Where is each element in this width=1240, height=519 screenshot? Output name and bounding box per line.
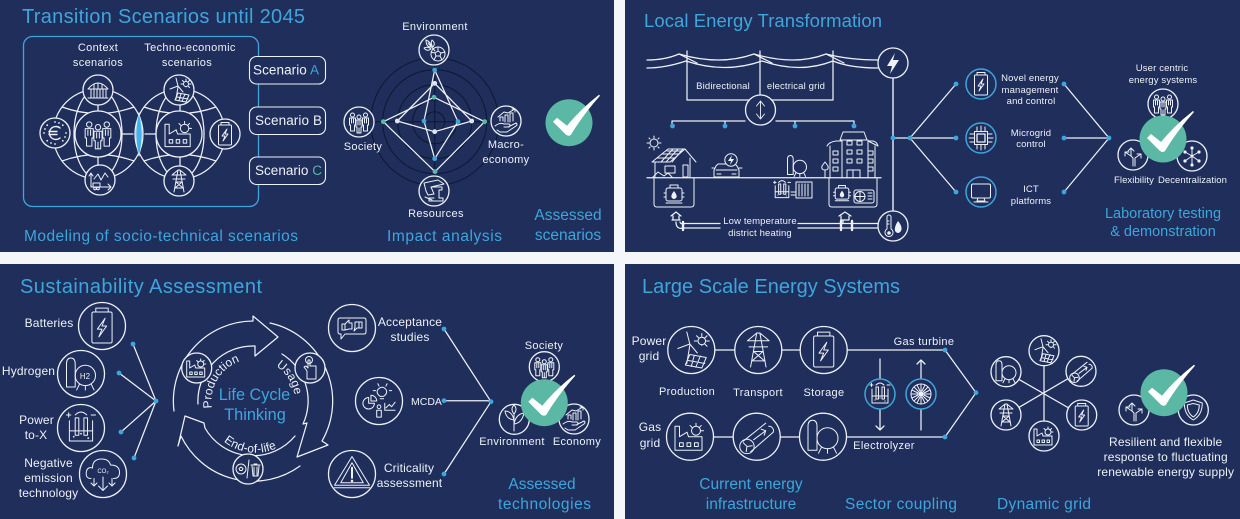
fan-out left (891, 82, 958, 194)
label: usage: Usage (278, 360, 300, 394)
icon: economy (559, 404, 589, 434)
label: production: Production (659, 386, 715, 398)
label: decentralization: Decentralization (1158, 175, 1227, 186)
label: microgrid control: Microgrid (1011, 128, 1051, 139)
dynamic grid network (991, 336, 1097, 451)
icon: hydrogen (58, 350, 104, 398)
title: local energy: Local Energy Transformation (644, 10, 882, 31)
power-to-gas equipment (774, 181, 812, 198)
text: response: Resilient and flexible (1109, 435, 1223, 449)
icon: transport (735, 326, 782, 374)
label: end of life: End-of-life (224, 435, 276, 453)
caption: current energy infrastructure: infrastructure (706, 496, 796, 513)
curved path: end of life (220, 438, 290, 453)
icon: end of life (233, 454, 263, 484)
panel: local energy transformation (625, 0, 1240, 252)
label: power to X: Power (19, 413, 54, 427)
connecting lines (714, 350, 976, 437)
icon: microgrid (966, 123, 996, 153)
label: bidirectional: Bidirectional (696, 81, 750, 92)
label: ICT platforms: platforms (1011, 196, 1051, 207)
label: transport: Transport (733, 387, 783, 399)
box: scenario C (250, 157, 326, 184)
connector dots (943, 348, 978, 439)
label: novel energy: Novel energy (1001, 73, 1059, 84)
label: flexibility: Flexibility (1114, 175, 1154, 186)
fan-in left (117, 342, 158, 460)
life cycle title: Life Cycle (219, 386, 290, 404)
icon: check (1140, 365, 1195, 416)
fan-in right (1062, 82, 1111, 194)
label: society: Society (525, 340, 563, 352)
icon: criticality (328, 450, 376, 498)
icon: usage (295, 353, 325, 383)
label: environment: Environment (479, 436, 545, 448)
scenario frame (24, 36, 258, 206)
box: scenario B (250, 107, 326, 134)
label: macro-economy: economy (482, 154, 530, 166)
label: techno-economic scenarios: scenarios (162, 57, 212, 69)
title: large scale: Large Scale Energy Systems (642, 276, 900, 298)
label: criticality assessment: Criticality (384, 461, 434, 475)
text: response: response to fluctuating (1104, 450, 1228, 464)
label: MCDA: MCDA (411, 396, 442, 408)
icon: resilience shield (1178, 395, 1208, 425)
building heat storage and pump (834, 186, 874, 203)
district heating pipes (671, 212, 878, 230)
icon: bidirectional converter (746, 95, 776, 125)
label: microgrid control: control (1016, 139, 1046, 150)
box: scenario A (250, 56, 326, 84)
hydrogen storage (788, 156, 806, 176)
label: gas grid: Gas (639, 420, 661, 434)
caption: assessed technologies: Assessed (508, 476, 576, 493)
icon: hydrogen: H2 (80, 372, 91, 381)
icon: environment (419, 35, 449, 65)
icon: check (1140, 111, 1194, 162)
small tree (822, 162, 828, 178)
icon: acceptance (328, 304, 376, 352)
text: response: renewable energy supply (1097, 465, 1234, 479)
radar chart (370, 58, 499, 186)
life cycle arrows (173, 316, 333, 481)
label: environment: Environment (402, 21, 468, 33)
caption: laboratory testing: Laboratory testing (1105, 206, 1221, 222)
caption: laboratory testing: & demonstration (1110, 224, 1216, 240)
globe: context (40, 75, 143, 195)
box: scenario C: Scenario C (255, 163, 322, 178)
label: storage: Storage (804, 387, 844, 399)
label: society: Society (344, 141, 382, 153)
icon: gas storage (800, 413, 846, 460)
icon: flexibility (1119, 395, 1149, 425)
trunk line (892, 78, 894, 211)
ground line (647, 177, 881, 179)
fan-in centre (442, 327, 493, 476)
label: acceptance studies: studies (390, 330, 430, 344)
label: production: Production (203, 356, 239, 408)
power lines (647, 51, 878, 100)
icon: energy management (966, 69, 996, 99)
icon: society (529, 352, 559, 382)
label: electrical grid: electrical grid (767, 81, 825, 92)
label: resources: Resources (408, 208, 464, 220)
caption: impact analysis: Impact analysis (387, 228, 502, 245)
label: context scenarios: scenarios (73, 57, 123, 69)
label: electrolyzer: Electrolyzer (853, 440, 915, 452)
label: power grid: grid (639, 349, 659, 363)
caption: modeling: Modeling of socio-technical scenarios (24, 228, 298, 245)
label: criticality assessment: assessment (377, 476, 443, 490)
icon: environment (499, 404, 529, 434)
label: power grid: Power (632, 334, 666, 348)
label: techno-economic scenarios: Techno-economic (144, 42, 236, 54)
icon: resources (419, 176, 449, 206)
label: negative emission technology: emission (24, 471, 73, 485)
icon: decentralization (1177, 141, 1207, 171)
icon: negative emissions (80, 450, 126, 498)
life cycle title: Thinking (224, 406, 286, 424)
label: district heating: district heating (728, 228, 792, 239)
curved path: production (211, 360, 245, 408)
panel: large scale energy systems (625, 264, 1240, 519)
curved path: usage (276, 366, 295, 400)
caption: current energy infrastructure: Current energy (699, 476, 803, 493)
icon: negative emissions: CO₂ (97, 469, 109, 475)
icon: check (546, 95, 600, 146)
label: negative emission technology: technology (19, 486, 78, 500)
label: power to X: to-X (25, 428, 47, 442)
label: gas turbine: Gas turbine (894, 336, 954, 348)
icon: power to X (58, 404, 104, 452)
caption: dynamic grid: Dynamic grid (997, 496, 1091, 513)
icon: electrolyzer (865, 379, 895, 409)
icon: gas production (666, 413, 714, 460)
lens connector (121, 113, 156, 156)
icon: electricity (878, 48, 908, 78)
caption: sector coupling: Sector coupling (845, 496, 957, 513)
house heat storage (664, 185, 684, 203)
label: novel energy: management (1002, 85, 1059, 96)
icon: gas turbine (906, 379, 936, 409)
label: hydrogen: Hydrogen (2, 364, 55, 378)
icon: gas transport (733, 413, 780, 460)
icon: MCDA (356, 378, 402, 424)
panel: sustainability assessment (0, 264, 614, 519)
panel: transition scenarios (0, 0, 614, 252)
icon: society (344, 107, 374, 137)
label: gas grid: grid (640, 436, 660, 450)
icon: macro-economy (491, 106, 521, 136)
icon: flexibility (1118, 140, 1148, 170)
box: scenario B: Scenario B (255, 113, 322, 128)
title: transition scenarios: Transition Scenarios until 2045 (22, 6, 305, 28)
icon: production (668, 326, 715, 374)
icon: production (182, 353, 212, 383)
icon: batteries (78, 302, 126, 350)
apartment building (827, 132, 878, 207)
label: economy: Economy (553, 436, 601, 448)
label: macro-economy: Macro- (488, 139, 524, 151)
icon: users (1148, 89, 1178, 119)
icon: heat (878, 211, 908, 241)
label: ICT platforms: ICT (1023, 184, 1039, 195)
label: user centric: energy systems (1129, 75, 1197, 86)
house (647, 136, 696, 207)
label: context scenarios: Context (78, 42, 118, 54)
title: sustainability: Sustainability Assessment (20, 276, 262, 298)
electric vehicle (712, 154, 742, 177)
label: user centric: User centric (1136, 63, 1188, 74)
caption: assessed scenarios: Assessed (534, 207, 602, 224)
icon: storage (800, 326, 847, 374)
label: novel energy: and control (1007, 96, 1055, 107)
label: district heating: Low temperature (723, 216, 797, 227)
icon: ICT (966, 177, 996, 207)
label: acceptance studies: Acceptance (378, 315, 442, 329)
label: negative emission technology: Negative (24, 456, 73, 470)
box: scenario A: Scenario A (253, 62, 319, 78)
icon: check (521, 375, 575, 426)
globe: techno-economic (135, 75, 240, 196)
label: batteries: Batteries (25, 316, 73, 330)
caption: assessed technologies: technologies (498, 496, 591, 513)
distribution bus (670, 121, 856, 128)
caption: assessed scenarios: scenarios (535, 227, 601, 244)
